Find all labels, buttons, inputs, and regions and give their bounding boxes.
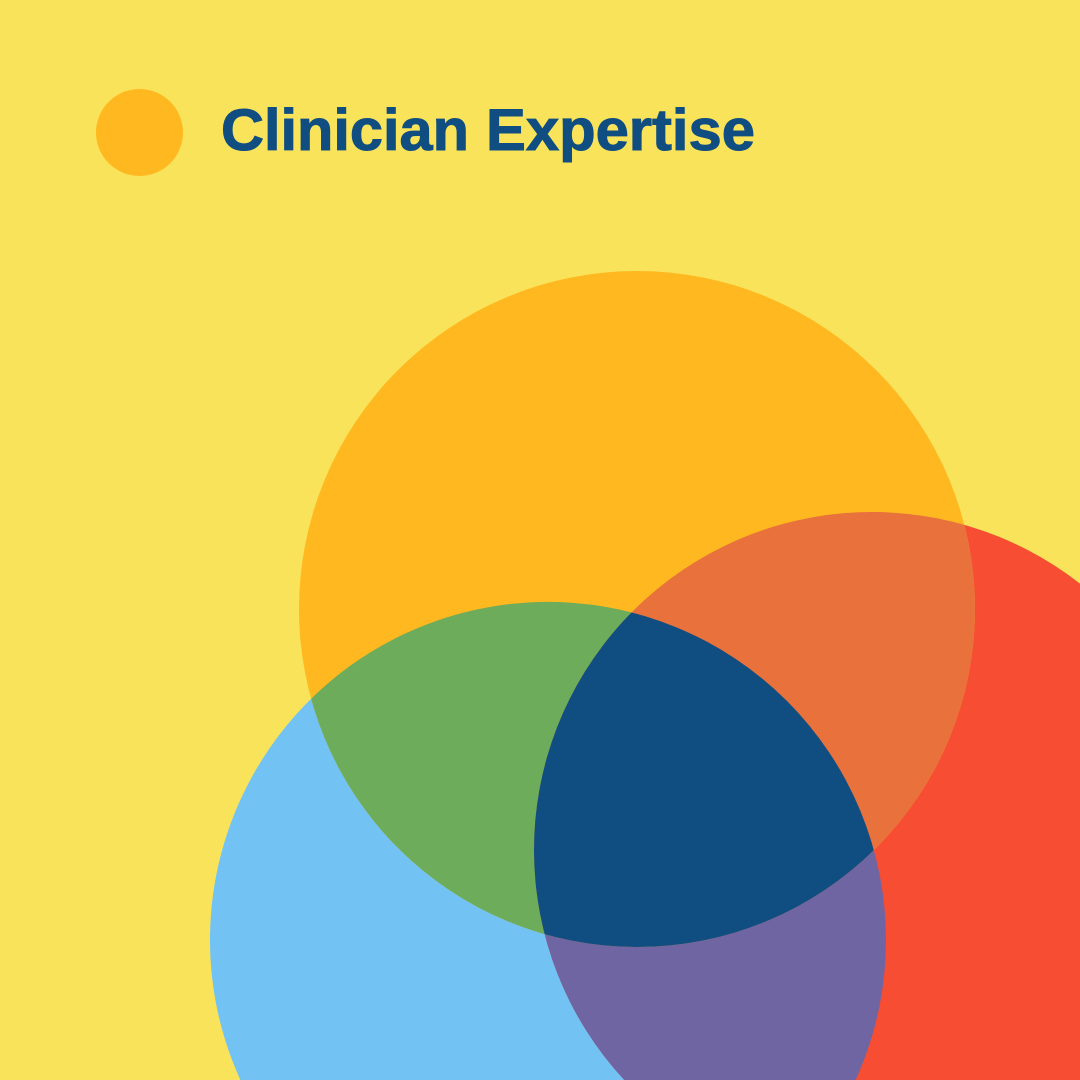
- overlap: all three circles: [534, 612, 874, 947]
- icon: orange legend dot: [96, 89, 183, 176]
- circle: red: [534, 512, 1080, 1080]
- overlap: orange and blue: [311, 602, 874, 947]
- title: Expertise: [486, 98, 755, 163]
- circle: blue: [210, 602, 886, 1080]
- circle: orange: [299, 271, 975, 947]
- overlap: orange and red: [534, 512, 975, 947]
- overlap: blue and red: [544, 850, 886, 1080]
- venn diagram: [210, 271, 1080, 1080]
- title: Clinician: [221, 98, 469, 163]
